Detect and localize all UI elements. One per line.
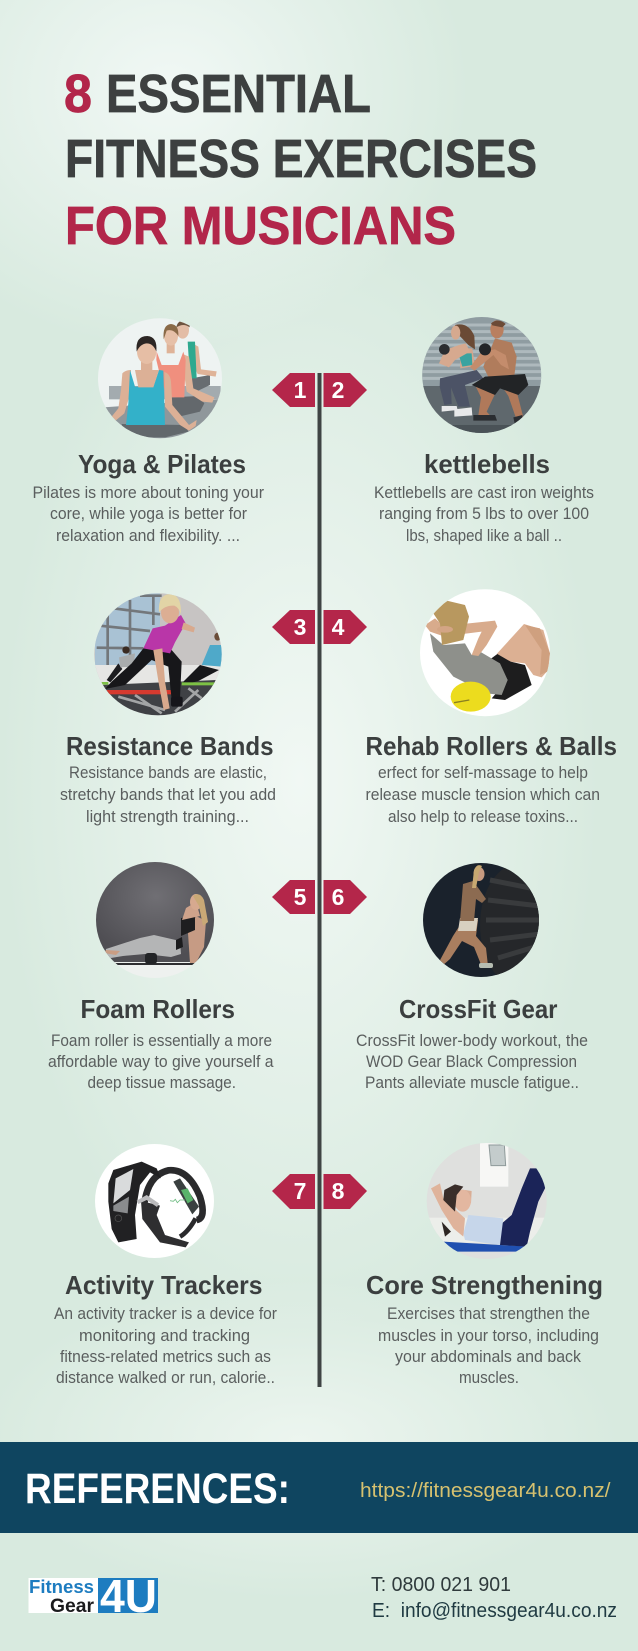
logo: Fitness Gear 4U: Fitness xyxy=(29,1577,94,1597)
section 5: Foam Rollers xyxy=(48,994,274,1092)
number badges 3 and 4: 4 xyxy=(332,614,345,640)
photo: crossfit gear xyxy=(423,863,539,977)
references band xyxy=(0,1442,638,1533)
number badges 7 and 8: 7 xyxy=(294,1178,306,1204)
section 1: Yoga & Pilates: core, while yoga is better for xyxy=(50,504,247,523)
section 6: CrossFit Gear xyxy=(356,994,588,1092)
section 1: Yoga & Pilates xyxy=(32,449,264,545)
references url: https://fitnessgear4u.co.nz/ xyxy=(360,1479,611,1502)
title: FOR MUSICIANS xyxy=(65,196,456,256)
section 8: Core Strengthening xyxy=(366,1270,603,1387)
logo: Fitness Gear 4U: 4U xyxy=(100,1570,157,1622)
photo: resistance bands xyxy=(92,590,225,718)
section 3: Resistance Bands: light strength training... xyxy=(86,807,249,826)
number badges 1 and 2 xyxy=(272,373,367,407)
logo: Fitness Gear 4U xyxy=(28,1570,158,1622)
section 7: Activity Trackers: monitoring and tracking xyxy=(79,1326,250,1345)
photo: rehab rollers and balls xyxy=(420,589,550,716)
photo: activity trackers xyxy=(95,1144,214,1258)
contact details xyxy=(371,1574,617,1622)
section 7: Activity Trackers: distance walked or run, calorie.. xyxy=(56,1368,275,1387)
title: FITNESS EXERCISES xyxy=(65,129,537,189)
section 7: Activity Trackers xyxy=(54,1270,277,1387)
section 3: Resistance Bands: Resistance bands are elastic, xyxy=(69,763,267,782)
photo: core strengthening xyxy=(427,1143,546,1259)
title: 8 xyxy=(64,64,92,124)
section 4: Rehab Rollers & Balls: release muscle tension which can xyxy=(366,785,600,804)
section 2: kettlebells: ranging from 5 lbs to over 100 xyxy=(379,504,589,523)
logo: Fitness Gear 4U: Gear xyxy=(50,1596,95,1617)
section 1: Yoga & Pilates: Pilates is more about toning your xyxy=(32,483,264,502)
title: ESSENTIAL xyxy=(106,64,371,124)
photo: foam rollers xyxy=(94,860,218,980)
section 6: CrossFit Gear: Pants alleviate muscle fatigue.. xyxy=(365,1073,579,1092)
title xyxy=(64,64,537,256)
center timeline line xyxy=(318,373,322,1387)
section 2: kettlebells: kettlebells xyxy=(424,449,550,479)
section 8: Core Strengthening: muscles in your torso, including xyxy=(378,1326,599,1345)
section 1: Yoga & Pilates: Yoga & Pilates xyxy=(78,449,246,479)
section 2: kettlebells xyxy=(374,449,594,545)
section 3: Resistance Bands: Resistance Bands xyxy=(66,731,274,761)
section 3: Resistance Bands xyxy=(60,731,276,826)
section 4: Rehab Rollers & Balls: Rehab Rollers & Balls xyxy=(366,731,617,761)
section 7: Activity Trackers: An activity tracker is a device for xyxy=(54,1304,277,1323)
section 5: Foam Rollers: deep tissue massage. xyxy=(88,1073,236,1092)
section 5: Foam Rollers: Foam Rollers xyxy=(80,994,235,1024)
section 2: kettlebells: lbs, shaped like a ball .. xyxy=(406,526,562,545)
number badges 1 and 2: 2 xyxy=(332,377,344,403)
section 5: Foam Rollers: Foam roller is essentially a more xyxy=(51,1031,272,1050)
number badges 5 and 6 xyxy=(272,880,367,914)
number badges 1 and 2: 1 xyxy=(294,377,307,403)
section 6: CrossFit Gear: CrossFit Gear xyxy=(399,994,558,1024)
section 8: Core Strengthening: your abdominals and back xyxy=(395,1347,581,1366)
number badges 5 and 6: 6 xyxy=(332,884,344,910)
number badges 7 and 8 xyxy=(272,1174,367,1209)
section 3: Resistance Bands: stretchy bands that let you add xyxy=(60,785,276,804)
number badges 5 and 6: 5 xyxy=(294,884,307,910)
section 7: Activity Trackers: fitness-related metrics such as xyxy=(60,1347,271,1366)
section 4: Rehab Rollers & Balls: also help to release toxins... xyxy=(388,807,578,826)
photo: kettlebells xyxy=(420,315,543,437)
contact details: T: 0800 021 901 xyxy=(371,1574,511,1596)
section 6: CrossFit Gear: WOD Gear Black Compression xyxy=(366,1052,577,1071)
number badges 7 and 8: 8 xyxy=(332,1178,345,1204)
section 8: Core Strengthening: Core Strengthening xyxy=(366,1270,603,1300)
photo: yoga and pilates xyxy=(95,315,225,440)
section 8: Core Strengthening: Exercises that strengthen the xyxy=(387,1304,590,1323)
section 2: kettlebells: Kettlebells are cast iron weights xyxy=(374,483,594,502)
section 4: Rehab Rollers & Balls xyxy=(366,731,617,826)
references heading: REFERENCES: xyxy=(25,1465,290,1513)
section 6: CrossFit Gear: CrossFit lower-body workout, the xyxy=(356,1031,588,1050)
section 5: Foam Rollers: affordable way to give yourself a xyxy=(48,1052,274,1071)
section 4: Rehab Rollers & Balls: erfect for self-massage to help xyxy=(378,763,588,782)
section 7: Activity Trackers: Activity Trackers xyxy=(65,1270,262,1300)
section 8: Core Strengthening: muscles. xyxy=(459,1368,519,1387)
section 1: Yoga & Pilates: relaxation and flexibility. ... xyxy=(56,526,240,545)
number badges 3 and 4: 3 xyxy=(294,614,306,640)
number badges 3 and 4 xyxy=(272,610,367,644)
contact details: E: info@fitnessgear4u.co.nz xyxy=(372,1600,617,1622)
